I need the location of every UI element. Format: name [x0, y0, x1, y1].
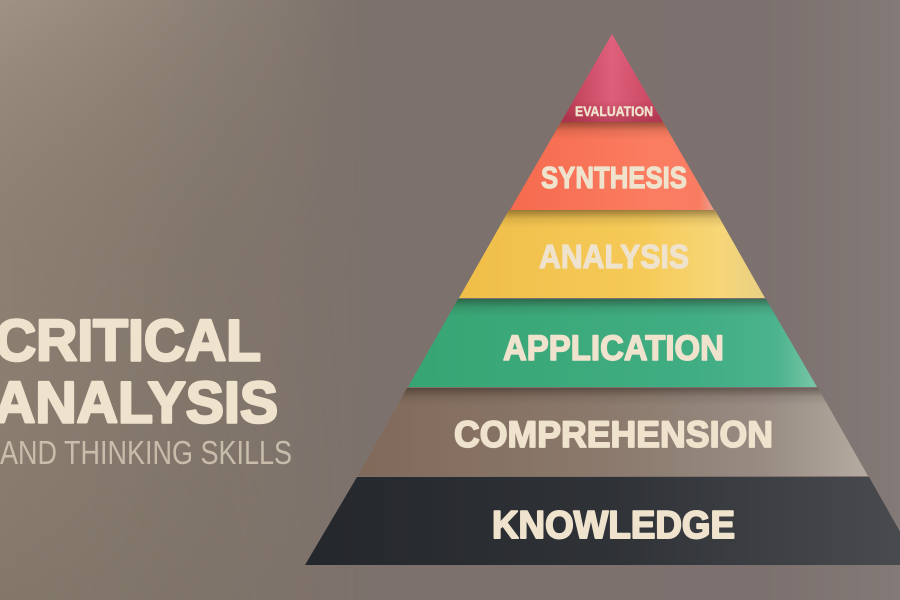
- label: analysis: ANALYSIS: [539, 238, 689, 275]
- label: evaluation: EVALUATION: [575, 103, 653, 119]
- level: evaluation: [561, 34, 663, 122]
- label: synthesis: SYNTHESIS: [541, 160, 687, 195]
- level: application: [408, 299, 817, 387]
- label: knowledge: KNOWLEDGE: [492, 504, 735, 547]
- level: comprehension: [358, 388, 868, 476]
- subtitle: AND THINKING SKILLS: [0, 434, 292, 471]
- label: application: APPLICATION: [503, 329, 724, 368]
- level: synthesis: [510, 122, 714, 210]
- pyramid: [305, 34, 900, 565]
- title: critical analysis: [0, 308, 278, 436]
- label: comprehension: COMPREHENSION: [454, 414, 773, 455]
- title: critical analysis: ANALYSIS: [0, 370, 278, 436]
- title: critical analysis: CRITICAL: [0, 308, 261, 374]
- level: knowledge: [305, 477, 900, 565]
- level: analysis: [459, 210, 765, 298]
